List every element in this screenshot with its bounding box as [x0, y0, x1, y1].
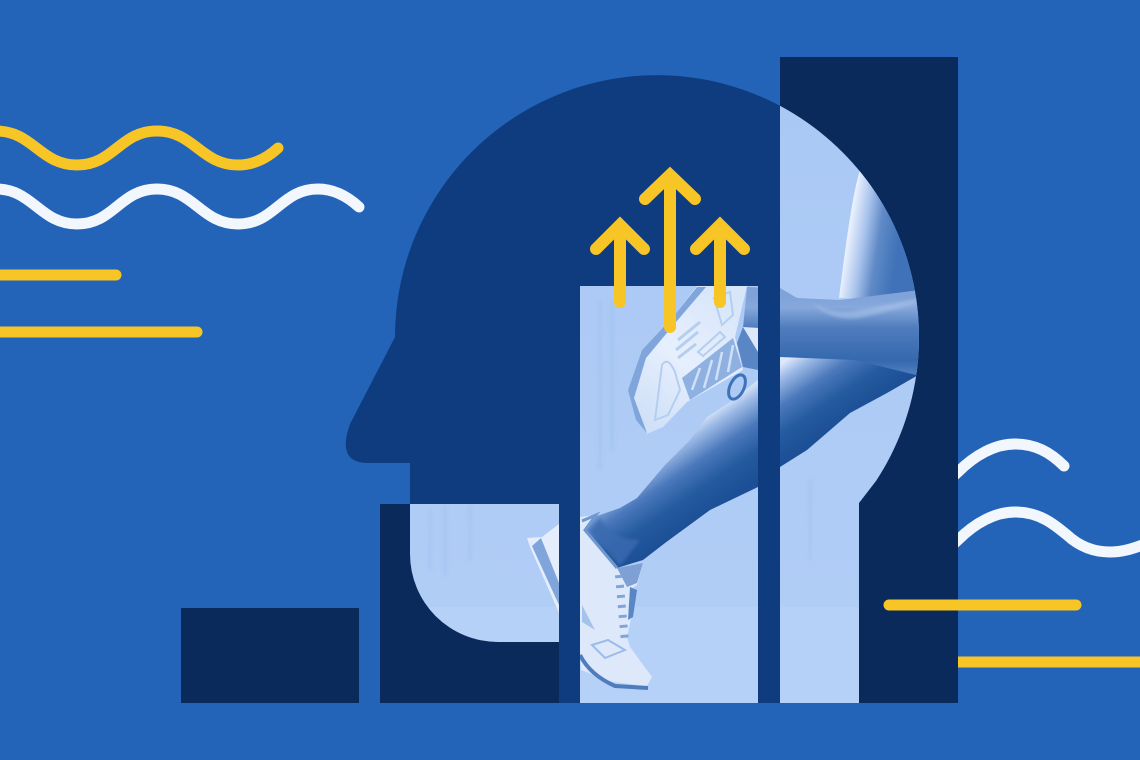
yellow wave top left — [0, 131, 278, 165]
back leg — [839, 171, 916, 299]
lace loop — [727, 373, 747, 401]
collar — [582, 515, 617, 568]
upper shoe — [628, 286, 749, 434]
bar 2 — [380, 504, 559, 703]
photo wall background — [410, 106, 919, 607]
lace shadow — [628, 587, 637, 620]
photo floor — [428, 607, 859, 703]
upper shin — [743, 287, 920, 376]
yellow line left upper — [0, 270, 116, 280]
side cutout — [582, 605, 595, 630]
side stripes — [676, 322, 700, 358]
side panel — [698, 292, 733, 356]
sock and dark ankle of upper leg — [737, 327, 758, 370]
toe strap — [592, 640, 625, 658]
head silhouette — [346, 75, 919, 703]
lower shoe heel part — [527, 524, 559, 613]
bar 4 — [780, 57, 958, 703]
tongue — [617, 563, 643, 587]
arrow middle — [645, 175, 695, 327]
running thigh and shin — [585, 356, 920, 568]
sole edge — [580, 655, 648, 688]
white wave right lower — [940, 512, 1140, 556]
white wave top left — [0, 189, 359, 224]
yellow line left lower — [0, 326, 197, 338]
laces — [619, 575, 625, 642]
laces — [682, 338, 742, 400]
shoe sole strip — [628, 287, 706, 433]
runner photo seen through the bars — [410, 106, 919, 703]
dark ankle shadow — [590, 518, 640, 566]
arrow left — [596, 225, 644, 302]
highlight on upper shin — [812, 298, 920, 319]
yellow line right lower — [940, 656, 1140, 668]
white wave right upper — [940, 444, 1064, 488]
arrow right — [696, 225, 744, 302]
lower shoe right part — [580, 515, 652, 688]
bar 1 — [181, 608, 359, 703]
toe cap stitching — [655, 362, 680, 420]
yellow line right upper — [889, 600, 1076, 610]
